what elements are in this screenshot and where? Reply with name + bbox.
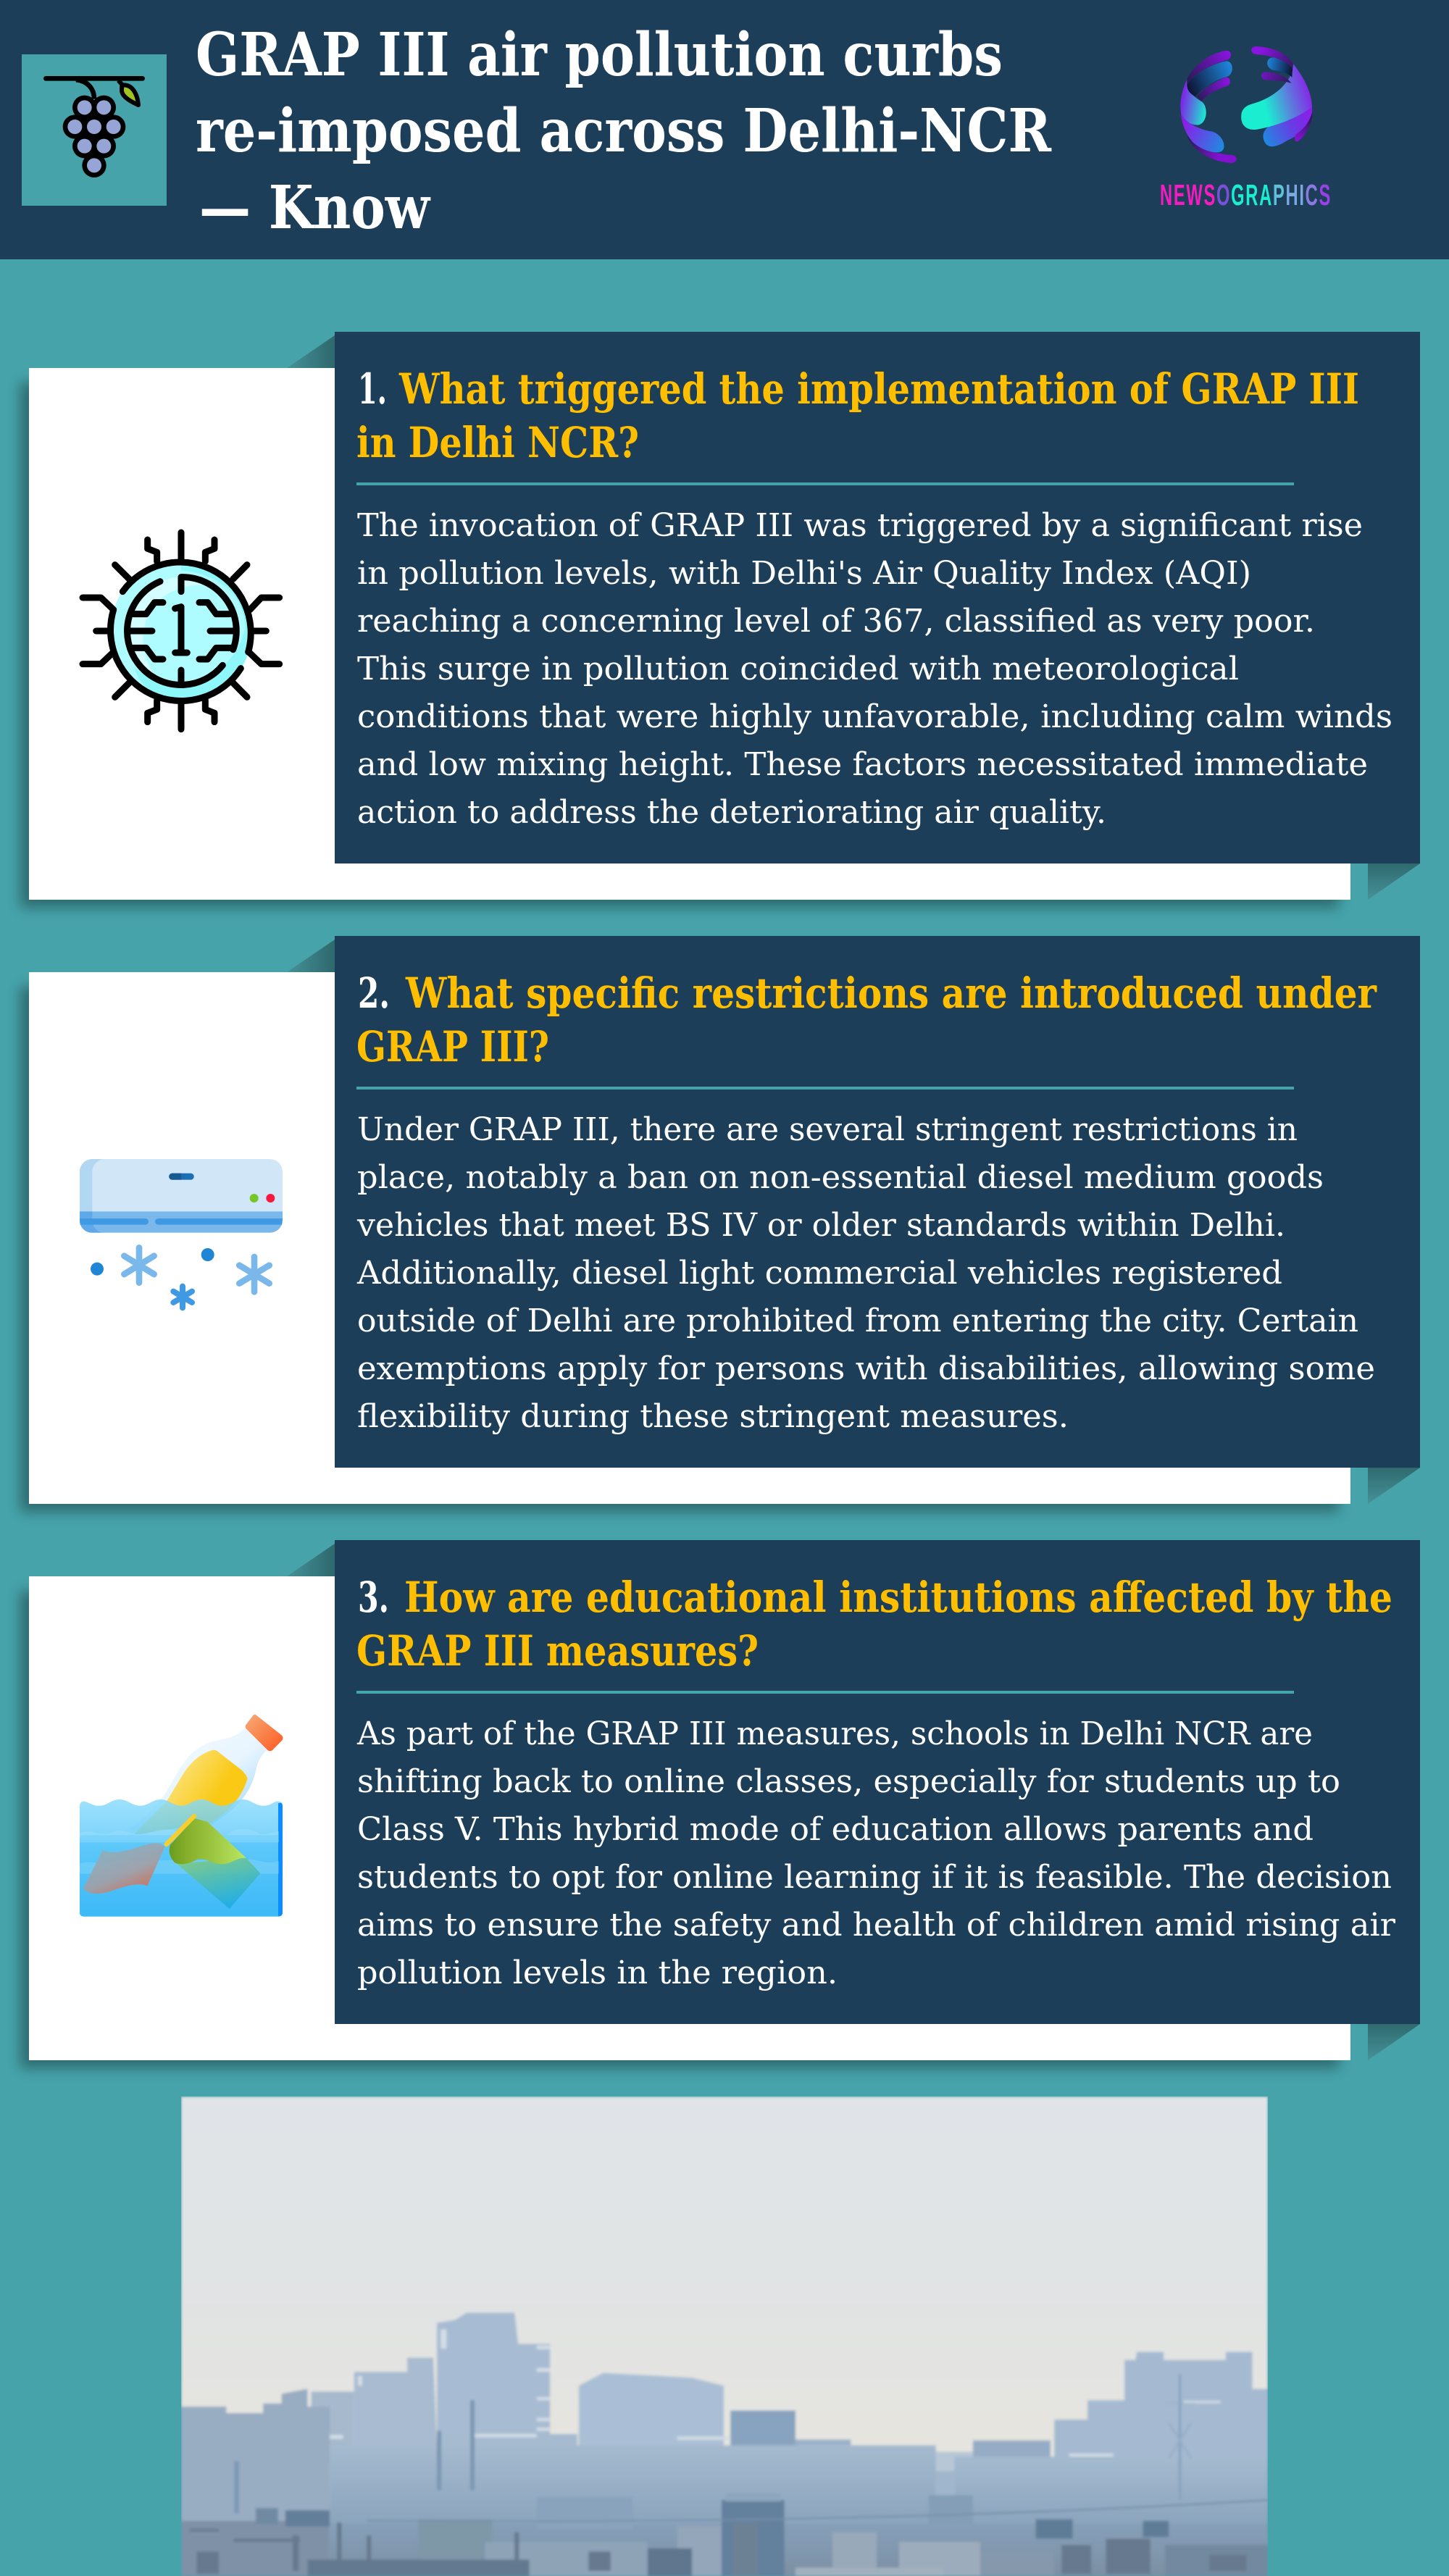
title — [196, 20, 1052, 243]
body text 3: As part of the GRAP III measures, schools in Delhi NCR are — [356, 1715, 1313, 1752]
body text 3 — [356, 1715, 1396, 1991]
panel 3: educational institutions — [20, 1540, 1420, 2068]
heading 2: 2. — [358, 969, 390, 1018]
body text 1: This surge in pollution coincided with meteorological — [357, 651, 1239, 687]
panel 2: specific restrictions — [20, 936, 1420, 1512]
heading 3: 3. — [358, 1573, 389, 1622]
body text 3: students to opt for online learning if it is feasible. The decision — [357, 1859, 1392, 1896]
body text 2: outside of Delhi are prohibited from entering the city. Certain — [357, 1302, 1358, 1339]
heading 3 — [356, 1573, 1392, 1676]
heading 2 — [356, 969, 1377, 1071]
body text 1: The invocation of GRAP III was triggered by a significant rise — [357, 507, 1363, 544]
body text 2: exemptions apply for persons with disabilities, allowing some — [357, 1350, 1375, 1387]
heading 2: GRAP III? — [356, 1022, 549, 1071]
body text 1: in pollution levels, with Delhi's Air Quality Index (AQI) — [357, 555, 1251, 592]
icon: virus chip — [83, 532, 280, 729]
header band — [0, 0, 1449, 259]
logo globe — [1180, 46, 1313, 163]
body text 1 — [357, 507, 1392, 831]
panel 1: what triggered GRAP III — [20, 332, 1420, 908]
body text 2 — [356, 1111, 1375, 1435]
body text 3: pollution levels in the region. — [357, 1954, 838, 1991]
body text 2: place, notably a ban on non-essential diesel medium goods — [357, 1159, 1324, 1196]
body text 3: aims to ensure the safety and health of children amid rising air — [357, 1907, 1396, 1944]
body text 3: Class V. This hybrid mode of education allows parents and — [357, 1811, 1314, 1848]
title: GRAP III air pollution curbs — [196, 20, 1003, 90]
title: — Know — [199, 173, 431, 243]
icon: air conditioner — [80, 1159, 283, 1308]
body text 2: Additionally, diesel light commercial vehicles registered — [356, 1255, 1282, 1292]
heading 1: in Delhi NCR? — [356, 418, 639, 467]
body text 2: flexibility during these stringent measures. — [357, 1398, 1069, 1435]
logo: Newsographics — [1160, 46, 1332, 212]
heading 1: 1. — [358, 364, 387, 414]
body text 1: conditions that were highly unfavorable, including calm winds — [357, 698, 1392, 735]
body text 2: Under GRAP III, there are several stringent restrictions in — [357, 1111, 1298, 1148]
body text 2: vehicles that meet BS IV or older standards within Delhi. — [356, 1207, 1285, 1244]
heading 1 — [356, 364, 1359, 467]
body text 1: reaching a concerning level of 367, classified as very poor. — [357, 603, 1315, 640]
icon: grapes — [22, 54, 167, 206]
photo: smog over city skyline — [181, 2096, 1268, 2576]
body text 1: and low mixing height. These factors necessitated immediate — [357, 746, 1368, 783]
heading 3: GRAP III measures? — [356, 1626, 759, 1676]
logo wordmark: NEWSOGRAPHICS — [1160, 178, 1332, 212]
body text 1: action to address the deteriorating air quality. — [357, 794, 1106, 831]
body text 3: shifting back to online classes, especially for students up to — [357, 1763, 1340, 1800]
icon: bottle in water — [80, 1715, 283, 1917]
title: re-imposed across Delhi-NCR — [196, 96, 1052, 166]
